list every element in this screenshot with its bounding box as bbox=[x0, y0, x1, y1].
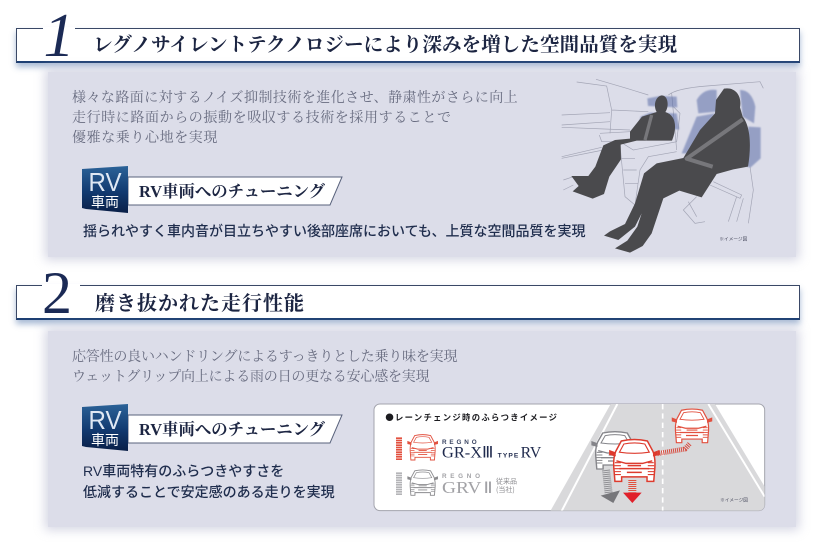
tuning description 2 bbox=[83, 463, 335, 500]
body text 2: ウェットグリップ向上による雨の日の更なる安心感を実現 bbox=[72, 370, 429, 385]
image note 2: ※イメージ図 bbox=[720, 498, 748, 504]
legend vibration bars grey bbox=[390, 472, 408, 496]
red car and motion arrow bbox=[610, 440, 659, 503]
seat belts bbox=[645, 115, 743, 167]
badge and ribbon: RV tuning: RV車両へのチューニング bbox=[139, 182, 325, 201]
badge and ribbon: RV tuning bbox=[82, 404, 343, 451]
number 1: 1 bbox=[44, 2, 74, 70]
GRV name: GRV bbox=[442, 478, 481, 497]
legend car grey bbox=[408, 470, 438, 495]
silhouette: rear passenger bbox=[571, 95, 675, 199]
seat line art bbox=[562, 79, 763, 223]
grey car and motion arrow bbox=[592, 432, 638, 503]
legend car red bbox=[408, 435, 438, 460]
body text 1: 優雅な乗り心地を実現 bbox=[72, 131, 218, 146]
tuning description 1: 揺られやすく車内音が目立ちやすい後部座席においても、上質な空間品質を実現 bbox=[83, 223, 585, 239]
image note 1: ※イメージ図 bbox=[719, 236, 748, 242]
GRV II label: REGNO bbox=[442, 473, 480, 480]
body text 2 bbox=[72, 348, 458, 385]
legend title: ●レーンチェンジ時のふらつきイメージ bbox=[385, 411, 557, 423]
legend: GRV II bbox=[399, 470, 517, 497]
body text 1: 走行時に路面からの振動を吸収する技術を採用することで bbox=[72, 111, 452, 126]
section 2 header bbox=[12, 260, 804, 328]
card: lane change image bbox=[374, 404, 766, 512]
lane change path bbox=[657, 443, 690, 454]
badge and ribbon: RV tuning: RV車両へのチューニング bbox=[139, 420, 325, 439]
body text 2: 応答性の良いハンドリングによるすっきりとした乗り味を実現 bbox=[72, 350, 457, 365]
seat illustration bbox=[562, 79, 764, 253]
road bbox=[550, 404, 765, 512]
badge and ribbon: RV tuning bbox=[82, 166, 343, 213]
body text 1 bbox=[72, 90, 518, 146]
legend: GR-XIII bbox=[399, 435, 541, 461]
red car upper bbox=[672, 409, 712, 443]
panel: section 1 bbox=[48, 72, 796, 257]
header bar 1 bbox=[16, 28, 800, 63]
legend vibration bars red bbox=[390, 437, 408, 461]
GR-XIII name: GR-XⅢ bbox=[442, 444, 493, 461]
tuning description 2: RV車両特有のふらつきやすさを bbox=[83, 463, 284, 479]
badge and ribbon: RV tuning: RV bbox=[88, 405, 122, 435]
own brand note: (当社) bbox=[496, 485, 515, 495]
GR-XIII label: REGNO bbox=[442, 439, 477, 446]
conventional note: 従来品 bbox=[496, 476, 517, 486]
seat highlights bbox=[637, 90, 761, 167]
header bar 2 bbox=[16, 285, 800, 320]
badge and ribbon: RV tuning: RV bbox=[88, 167, 122, 197]
RV label: RV bbox=[521, 444, 541, 461]
card background bbox=[374, 404, 765, 511]
badge and ribbon: RV tuning: 車両 bbox=[91, 192, 119, 212]
number 2: 2 bbox=[42, 260, 72, 326]
heading 2: 磨き抜かれた走行性能 bbox=[95, 293, 305, 315]
heading 1: レグノサイレントテクノロジーにより深みを増した空間品質を実現 bbox=[93, 35, 677, 56]
section 1 header bbox=[12, 2, 804, 71]
silhouette: front passenger bbox=[604, 88, 750, 253]
tuning description 2: 低減することで安定感のある走りを実現 bbox=[83, 484, 335, 500]
panel: section 2 bbox=[48, 331, 796, 527]
II numeral: Ⅱ bbox=[483, 480, 493, 497]
badge and ribbon: RV tuning: 車両 bbox=[91, 430, 119, 450]
body text 1: 様々な路面に対するノイズ抑制技術を進化させ、静粛性がさらに向上 bbox=[72, 91, 518, 106]
type label: TYPE bbox=[498, 452, 519, 459]
